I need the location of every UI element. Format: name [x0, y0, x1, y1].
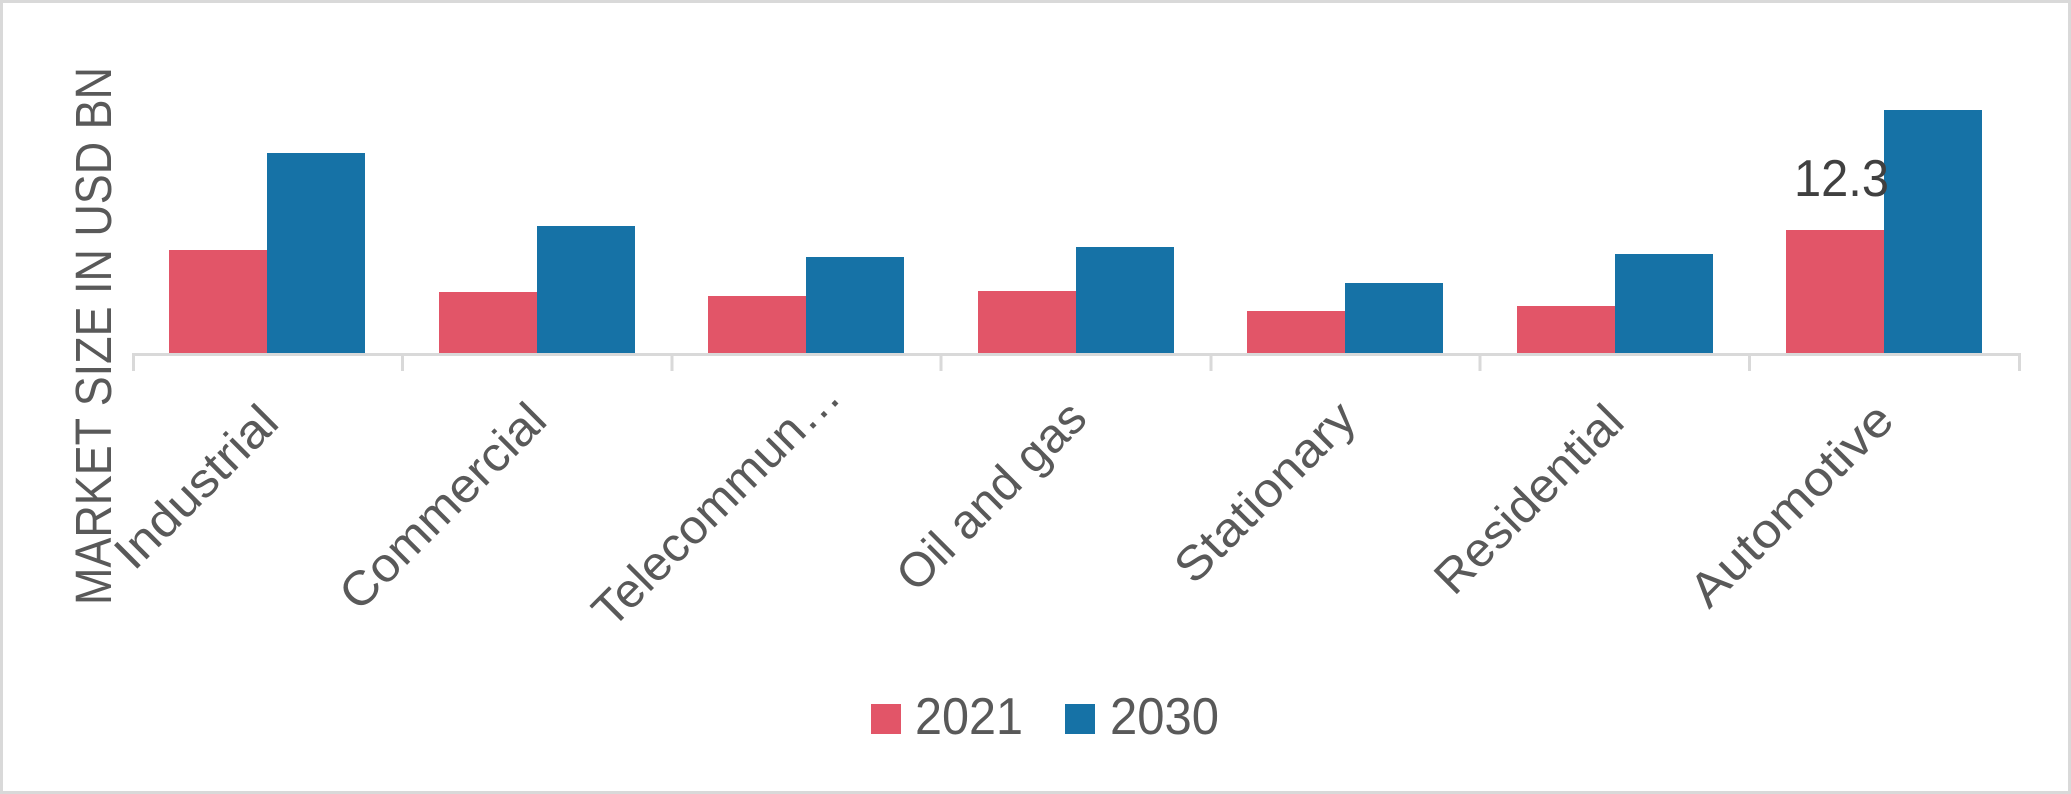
- legend item: 2030: [1065, 688, 1219, 746]
- bars: Residential: [1517, 254, 1713, 353]
- category label: Industrial: Industrial: [104, 395, 289, 580]
- legend item: 2021: 2021: [915, 688, 1023, 746]
- y-axis title: MARKET SIZE IN USD BN: [65, 67, 122, 605]
- legend item: 2030: 2030: [1110, 688, 1219, 746]
- category label: Residential: Residential: [1424, 395, 1634, 605]
- category label: Commercial: Commercial: [329, 393, 557, 621]
- category label: Oil and gas: Oil and gas: [886, 391, 1097, 602]
- legend: [871, 688, 1219, 746]
- legend item: 2021: [871, 688, 1023, 746]
- category label: Automotive: Automotive: [1679, 393, 1904, 618]
- data label: 12.3: 12.3: [1794, 150, 1889, 208]
- bars: Telecommunication: [708, 257, 904, 353]
- category label: Stationary: Stationary: [1164, 392, 1367, 594]
- bars: Stationary: [1247, 283, 1443, 353]
- bars: Automotive: [1786, 110, 1982, 353]
- bars: Oil and gas: [978, 247, 1174, 353]
- category label: Telecommun…: Telecommun…: [582, 369, 851, 638]
- bars: Commercial: [439, 226, 635, 353]
- bars: Industrial: [169, 153, 365, 353]
